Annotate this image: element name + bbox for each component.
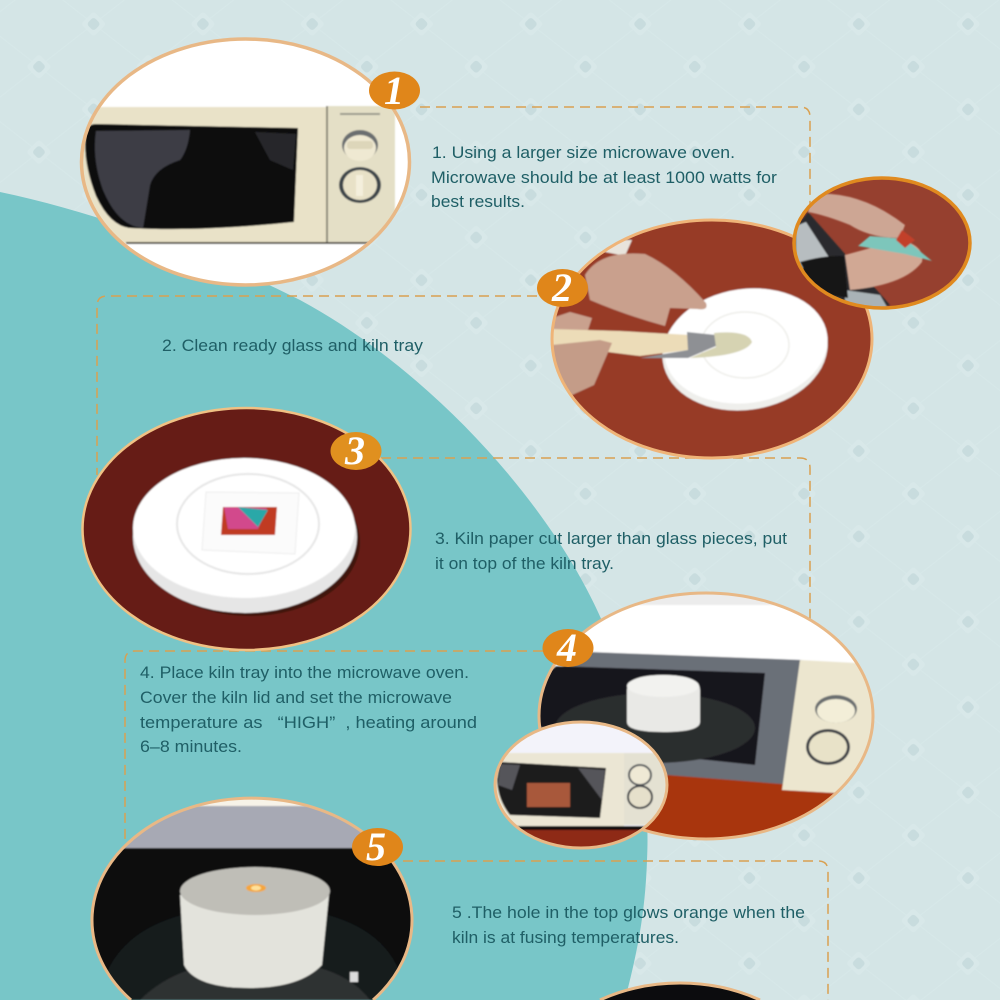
badge 5: 5 [366,824,386,869]
small photo circle 2: cleaning the glass [794,178,970,312]
dashed connector: step 5 [403,861,828,1000]
small photo circle 4: microwave running [494,720,669,850]
photo circle 1: microwave oven [80,38,412,288]
step 3 text [435,530,787,573]
badge 2: 2 [551,265,572,310]
badge 3 [330,428,382,473]
photo circle 4: kiln inside microwave [536,592,875,842]
step 4 text: Cover the kiln lid and set the microwave [140,689,452,707]
step 5 text [452,904,805,947]
step 4 text: temperature as “HIGH” , heating around [140,714,477,732]
step 1 text [431,144,778,211]
dashed connector: step 2 [97,296,537,475]
step 4 text [140,664,477,756]
step 1 text: best results. [431,193,525,211]
dashed connector: step 4 [125,651,543,845]
badge 4 [542,625,594,670]
badge 4: 4 [556,625,577,670]
step 1 text: 1. Using a larger size microwave oven. [432,144,735,162]
photo circle 6: cropped next step [600,983,760,1000]
step 3 text: it on top of the kiln tray. [435,555,614,573]
badge 2 [537,265,588,310]
step 3 text: 3. Kiln paper cut larger than glass pieces, put [435,530,787,548]
dashed connector: step 3 [381,458,810,625]
dashed connector: step 1 [420,107,810,215]
badge 5 [352,824,403,869]
step 1 text: Microwave should be at least 1000 watts for [431,169,778,187]
badge 1: 1 [384,68,404,113]
step 4 text: 4. Place kiln tray into the microwave oven. [140,664,469,682]
step 4 text: 6–8 minutes. [140,738,242,756]
teal curved background shape [0,192,648,1000]
photo circle 5: glowing kiln [90,796,415,1000]
badge 3: 3 [344,428,365,473]
step 2 text: 2. Clean ready glass and kiln tray [162,337,424,355]
step 5 text: 5 .The hole in the top glows orange when the [452,904,805,922]
step 5 text: kiln is at fusing temperatures. [452,929,679,947]
photo circle 3: kiln paper on tray [80,405,415,653]
badge 1 [369,68,420,113]
photo circle 2: brushing the kiln tray [550,218,875,460]
